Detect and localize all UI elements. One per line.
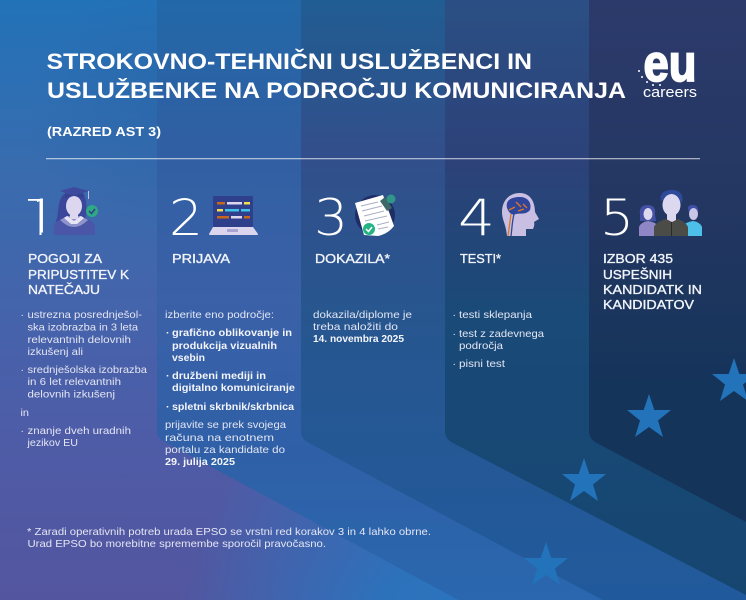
step 2 text: družbeni mediji in	[172, 370, 266, 382]
step 1 text: relevantnih delovnih	[28, 334, 131, 346]
icon: group of people	[639, 190, 702, 236]
icon: graduate	[54, 187, 98, 235]
step 4 text: ·	[452, 309, 456, 321]
step 5 heading: KANDIDATK IN	[603, 282, 702, 297]
step 4 number: 4	[458, 189, 495, 247]
step 1 heading: PRIPUSTITEV K	[28, 267, 129, 282]
step 2 text: ·	[166, 401, 170, 413]
step 4 text: področja	[459, 340, 503, 352]
step 2 text: prijavite se prek svojega	[165, 419, 286, 431]
step 1	[20, 187, 147, 449]
icon: head with brain	[502, 193, 539, 236]
step 3 text: 14. novembra 2025	[313, 333, 404, 345]
step 4 text: ·	[452, 358, 456, 370]
step 1 text: ·	[20, 309, 24, 321]
step 5 heading: USPEŠNIH	[603, 267, 672, 282]
step 3 number: 3	[314, 189, 348, 247]
title: STROKOVNO-TEHNIČNI USLUŽBENCI IN	[46, 49, 532, 74]
step 1 text: srednješolska izobrazba	[28, 364, 147, 376]
footnote: Urad EPSO bo morebitne spremembe sporočil pravočasno.	[28, 538, 326, 550]
step 4 text: testi sklepanja	[459, 309, 532, 321]
step 4 text: ·	[452, 328, 456, 340]
step 1 heading	[28, 251, 129, 297]
step 3 text: treba naložiti do	[313, 321, 398, 333]
step 1 text: delovnih izkušenj	[28, 388, 115, 400]
decorative EU stars	[524, 358, 746, 585]
step 3 text: dokazila/diplome je	[313, 309, 412, 321]
step 1 text: jezikov EU	[26, 437, 78, 449]
step 3	[313, 189, 412, 345]
step 2 text	[165, 309, 295, 468]
title	[46, 49, 626, 103]
subtitle: (RAZRED AST 3)	[47, 124, 161, 139]
step 2 text: ·	[166, 370, 170, 382]
step 2 number: 2	[169, 189, 203, 247]
step 1 heading: NATEČAJU	[28, 282, 100, 297]
step 1 heading: POGOJI ZA	[28, 251, 102, 266]
step 5 heading	[603, 251, 702, 312]
step 4 heading: TESTI*	[460, 251, 501, 266]
step 2 text: digitalno komuniciranje	[172, 382, 295, 394]
step 5 number: 5	[600, 189, 634, 247]
step 5 heading: KANDIDATOV	[603, 297, 694, 312]
step 2 text: portalu za kandidate do	[165, 444, 285, 456]
step 1 text: ·	[20, 425, 24, 437]
step 2 text: izberite eno področje:	[165, 309, 274, 321]
step 2 heading: PRIJAVA	[172, 251, 230, 266]
step 1 text: ·	[20, 364, 24, 376]
step 4 text: test z zadevnega	[459, 328, 544, 340]
step 2 text: ·	[166, 327, 170, 339]
step 3 text	[313, 309, 412, 345]
step 4 text: pisni test	[459, 358, 505, 370]
logo: EU careers: careers	[643, 84, 697, 101]
step 1 number: 1	[25, 189, 57, 247]
step 1 text	[20, 309, 147, 449]
footnote	[27, 526, 431, 550]
title: USLUŽBENKE NA PODROČJU KOMUNICIRANJA	[47, 78, 626, 103]
step 2 text: vsebin	[172, 352, 205, 364]
icon: laptop	[209, 196, 258, 235]
step 4	[452, 189, 544, 370]
step 1 text: in 6 let relevantnih	[28, 376, 121, 388]
step 2 text: grafično oblikovanje in	[172, 327, 292, 339]
step 1 text: in	[20, 407, 29, 419]
step 1 text: ustrezna posrednješol-	[28, 309, 143, 321]
step 1 text: izkušenj ali	[28, 346, 83, 358]
step 2	[165, 189, 295, 468]
step 5 heading: IZBOR 435	[603, 251, 673, 266]
icon: document with stamp	[355, 194, 396, 236]
step 1 text: ska izobrazba in 3 leta	[28, 322, 138, 334]
step 2 text: spletni skrbnik/skrbnica	[172, 401, 294, 413]
footnote: * Zaradi operativnih potreb urada EPSO se vrstni red korakov 3 in 4 lahko obrne.	[27, 526, 431, 538]
logo: EU careers: eu	[644, 35, 696, 93]
step 4 text	[452, 309, 544, 370]
step 2 text: 29. julija 2025	[165, 456, 235, 468]
step 3 heading: DOKAZILA*	[315, 251, 390, 266]
step 1 number	[28, 198, 43, 235]
step 2 text: računa na enotnem	[165, 432, 274, 444]
step 2 text: produkcija vizualnih	[172, 340, 277, 352]
step 5	[600, 189, 702, 312]
step 1 text: znanje dveh uradnih	[28, 425, 131, 437]
